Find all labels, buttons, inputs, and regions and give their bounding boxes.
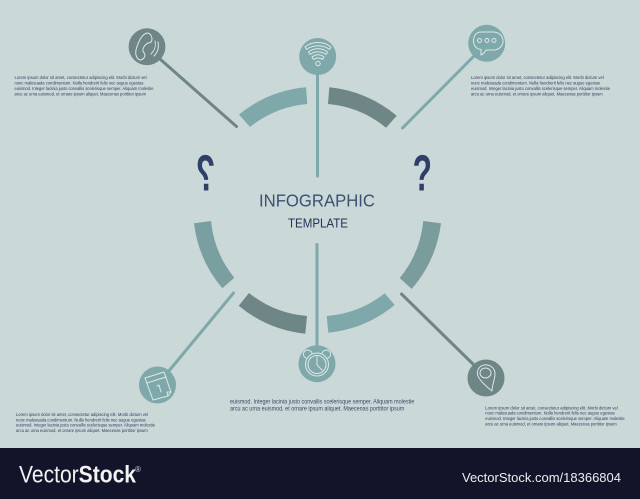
text block: calendar: Lorem ipsum dolor sit amet, consectetur adipiscing elit. Morbi dictum vel — [16, 412, 148, 417]
text block: location: nunc malesuada condimentum. Nulla hendrerit felis nec augue egestas — [485, 411, 615, 416]
text block: chat: nunc malesuada condimentum. Nulla hendrerit felis nec augue egestas — [471, 81, 601, 86]
footer banner — [0, 448, 640, 499]
text block: phone: arcu ac urna euismod, et ornare ipsum aliquet. Maecenas porttitor ipsum — [14, 92, 146, 97]
text block: clock: arcu ac urna euismod, et ornare ipsum aliquet. Maecenas porttitor ipsum — [230, 405, 404, 412]
text block: location — [485, 405, 625, 427]
connector: location — [402, 294, 475, 366]
text block: calendar: euismod. Integer lacinia justo convallis scelerisque semper. Aliquam molestie — [16, 423, 155, 428]
text block: phone: Lorem ipsum dolor sit amet, consectetur adipiscing elit. Morbi dictum vel — [14, 75, 146, 80]
registered mark: ® — [135, 465, 141, 474]
connector: clock — [316, 244, 318, 350]
text block: phone: euismod. Integer lacinia justo convallis scelerisque semper. Aliquam molestie — [14, 86, 154, 91]
icon: phone — [129, 28, 165, 65]
text block: phone — [14, 75, 154, 97]
arc segment: top left — [239, 87, 307, 127]
text block: calendar — [16, 412, 155, 433]
connector: calendar — [168, 293, 234, 372]
text block: location: Lorem ipsum dolor sit amet, consectetur adipiscing elit. Morbi dictum vel — [485, 405, 618, 410]
watermark url: VectorStock.com/18366804 — [462, 470, 621, 485]
text block: clock — [230, 398, 415, 412]
icon: calendar — [139, 366, 176, 404]
text block: chat: Lorem ipsum dolor sit amet, consectetur adipiscing elit. Morbi dictum vel — [471, 75, 604, 80]
arc segment: lower left — [194, 221, 234, 288]
connector: chat — [402, 54, 476, 128]
icon: speech bubble — [468, 25, 505, 62]
text block: location: arcu ac urna euismod, et ornare ipsum aliquet. Maecenas porttitor ipsum — [485, 422, 617, 427]
icon: alarm clock — [298, 345, 336, 382]
text block: phone: nunc malesuada condimentum. Nulla hendrerit felis nec augue egestas — [14, 81, 144, 86]
text block: chat: euismod. Integer lacinia justo convallis scelerisque semper. Aliquam molestie — [471, 86, 610, 91]
title: INFOGRAPHIC — [259, 191, 375, 211]
text block: chat: arcu ac urna euismod, et ornare ipsum aliquet. Maecenas porttitor ipsum — [471, 92, 603, 97]
arc segment: top right — [328, 87, 397, 128]
icon: map pin — [468, 360, 504, 396]
watermark logo: VectorStock — [19, 462, 137, 488]
text block: chat — [471, 75, 610, 97]
text block: calendar: arcu ac urna euismod, et ornare ipsum aliquet. Maecenas porttitor ipsum — [16, 428, 148, 433]
arc segment: bottom right — [327, 293, 395, 333]
arc segment: lower right — [400, 221, 441, 289]
connector: phone — [160, 59, 236, 126]
connector: wifi — [316, 70, 319, 176]
question mark: left mirrored: ? — [196, 145, 215, 201]
arc segment: bottom left — [239, 293, 307, 334]
icon: wifi — [299, 38, 336, 75]
question mark: right: ? — [413, 145, 432, 201]
text block: clock: euismod. Integer lacinia justo convallis scelerisque semper. Aliquam molestie — [230, 398, 415, 405]
subtitle: TEMPLATE — [288, 216, 348, 230]
text block: calendar: nunc malesuada condimentum. Nulla hendrerit felis nec augue egestas — [16, 417, 146, 422]
